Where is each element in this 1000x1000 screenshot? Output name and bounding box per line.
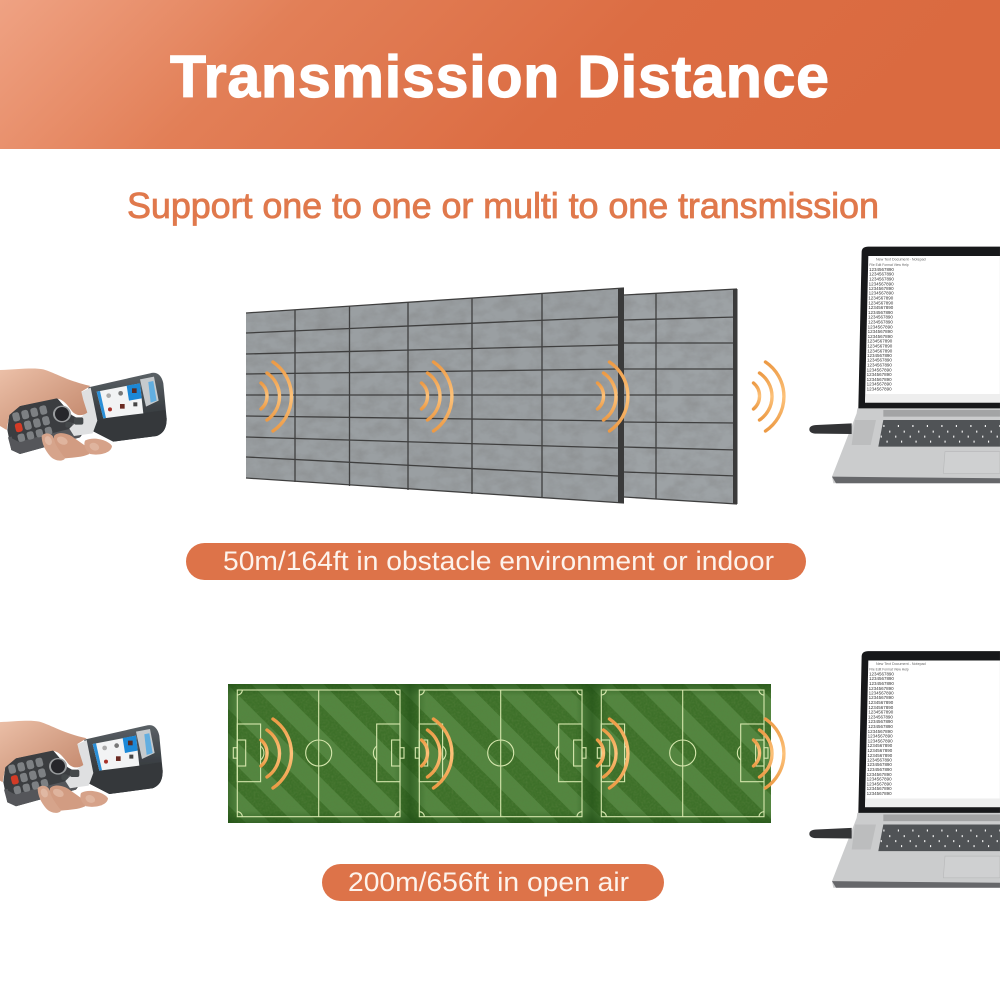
- notepad text: 1234567890: [867, 353, 892, 358]
- notepad text: 1234567890: [867, 786, 892, 791]
- notepad text: 1234567890: [868, 700, 894, 705]
- notepad text: [867, 258, 926, 392]
- notepad text: 1234567890: [867, 753, 893, 758]
- notepad text: 1234567890: [868, 719, 893, 724]
- notepad text: 1234567890: [868, 705, 894, 710]
- notepad text: 1234567890: [869, 676, 894, 681]
- lower fingers: [38, 785, 108, 813]
- notepad text: 1234567890: [868, 329, 893, 334]
- notepad text: 1234567890: [867, 372, 892, 377]
- wave 1: [261, 719, 291, 788]
- scanner in hand: lower: [0, 721, 163, 813]
- notepad text: New Text Document - Notepad: [876, 258, 926, 262]
- notepad text: 1234567890: [867, 767, 892, 772]
- hand and thumb: [0, 368, 91, 430]
- notepad text: 1234567890: [868, 300, 894, 305]
- notepad text: 1234567890: [868, 738, 893, 743]
- notepad text: 1234567890: [869, 286, 894, 291]
- wave 2: [422, 719, 452, 788]
- notepad text: 1234567890: [867, 743, 893, 748]
- notepad text: 1234567890: [869, 671, 894, 676]
- notepad text: 1234567890: [868, 729, 893, 734]
- notepad text: 1234567890: [868, 709, 894, 714]
- notepad text: 1234567890: [867, 757, 892, 762]
- info pill: indoor range: [186, 543, 806, 580]
- info pill: indoor range: 50m/164ft in obstacle environment or indoor: [223, 546, 774, 576]
- notepad text: 1234567890: [869, 686, 894, 691]
- notepad text: 1234567890: [867, 358, 892, 363]
- notepad text: 1234567890: [867, 367, 892, 372]
- notepad text: 1234567890: [867, 387, 892, 392]
- wall: front panel: [246, 288, 624, 503]
- field 1: [233, 690, 404, 817]
- keypad body: [3, 750, 85, 806]
- field 2: [415, 690, 586, 817]
- wave 1: [261, 362, 291, 431]
- notepad text: 1234567890: [867, 748, 893, 753]
- notepad text: 1234567890: [867, 791, 892, 796]
- notepad text: 1234567890: [868, 310, 893, 315]
- notepad text: 1234567890: [868, 315, 893, 320]
- wave 4: [754, 719, 784, 788]
- info pill: open air range: [322, 864, 664, 901]
- field 3: [597, 690, 768, 817]
- info pill: open air range: 200m/656ft in open air: [348, 867, 629, 897]
- laptop with receiver: upper: [809, 247, 1000, 483]
- notepad text: [867, 662, 926, 796]
- wall: rear panel: [624, 289, 738, 504]
- notepad text: 1234567890: [869, 267, 894, 272]
- notepad text: 1234567890: [869, 272, 894, 277]
- concrete walls: [246, 288, 738, 504]
- scanner head: [69, 373, 167, 442]
- scanner head: [65, 725, 163, 794]
- notepad text: 1234567890: [869, 681, 894, 686]
- notepad text: 1234567890: [867, 339, 893, 344]
- USB receiver: [809, 828, 852, 838]
- scanner in hand: upper: [0, 368, 167, 461]
- notepad text: 1234567890: [868, 296, 894, 301]
- notepad text: 1234567890: [867, 343, 893, 348]
- notepad text: 1234567890: [867, 363, 892, 368]
- notepad text: 1234567890: [867, 772, 892, 777]
- football fields: [228, 684, 771, 823]
- notepad text: New Text Document - Notepad: [876, 662, 926, 666]
- notepad text: 1234567890: [868, 334, 893, 339]
- wave 3: [598, 362, 628, 431]
- notepad text: 1234567890: [868, 724, 893, 729]
- notepad text: 1234567890: [868, 319, 893, 324]
- notepad text: 1234567890: [869, 291, 894, 296]
- USB receiver: [809, 423, 852, 434]
- notepad text: 1234567890: [867, 348, 893, 353]
- notepad text: 1234567890: [867, 776, 892, 781]
- lower fingers: [42, 433, 112, 461]
- laptop with receiver: lower: [809, 651, 1000, 888]
- header banner: [0, 0, 1000, 149]
- notepad text: 1234567890: [868, 324, 893, 329]
- notepad text: 1234567890: [868, 305, 894, 310]
- notepad text: 1234567890: [867, 762, 892, 767]
- notepad text: 1234567890: [869, 690, 894, 695]
- notepad text: File Edit Format View Help: [869, 263, 909, 267]
- keypad body: [7, 398, 89, 454]
- notepad text: 1234567890: [867, 781, 892, 786]
- subtitle: Support one to one or multi to one transmission: [127, 185, 879, 226]
- title: Transmission Distance: [170, 44, 829, 110]
- notepad text: 1234567890: [867, 377, 892, 382]
- signal waves: lower row: [261, 719, 784, 788]
- notepad text: 1234567890: [868, 714, 893, 719]
- hand and thumb: [0, 721, 87, 782]
- notepad text: 1234567890: [869, 276, 894, 281]
- notepad text: 1234567890: [869, 281, 894, 286]
- wave 3: [598, 719, 628, 788]
- notepad text: 1234567890: [867, 382, 892, 387]
- wave 2: [422, 362, 452, 431]
- notepad text: File Edit Format View Help: [869, 667, 909, 671]
- wave 4: [754, 362, 784, 431]
- notepad text: 1234567890: [869, 695, 894, 700]
- notepad text: 1234567890: [868, 733, 893, 738]
- signal waves: upper row: [261, 362, 784, 431]
